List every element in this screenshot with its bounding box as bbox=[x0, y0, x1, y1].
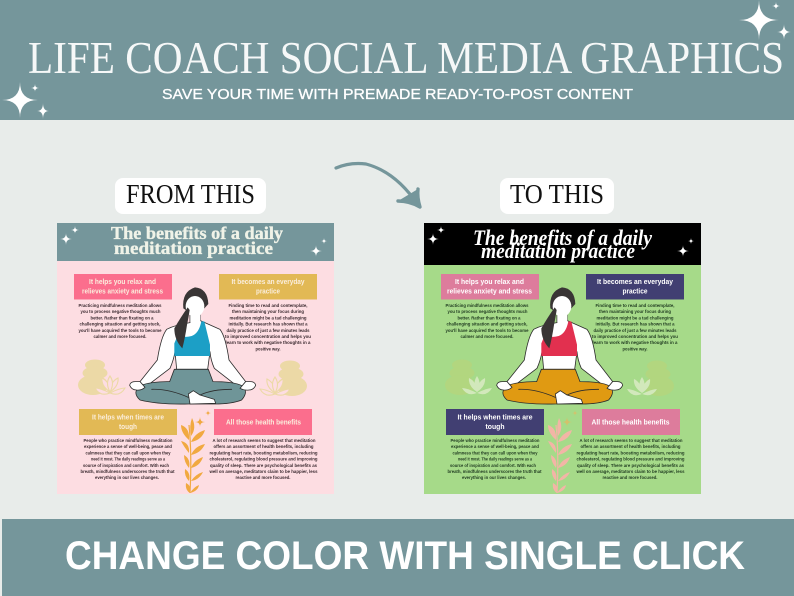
text: everyday body: learn to work with negative thoughts in a bbox=[226, 340, 311, 346]
text: health benefits body: offers an assortment of health benefits, including bbox=[580, 444, 681, 450]
label: tough times: tough bbox=[486, 424, 504, 431]
text: health benefits body: cholesterol, regulating blood pressure and improving bbox=[210, 457, 318, 463]
text: health benefits body: regulating heart rate, boosting metabolism, reducing bbox=[576, 450, 685, 456]
meditating figure bbox=[497, 287, 623, 404]
label: everyday: practice bbox=[622, 288, 648, 296]
label: health benefits: All those health benefits bbox=[226, 420, 301, 426]
text: health benefits body: well on average, meditators claim to be happier, less bbox=[576, 469, 685, 475]
text: everyday body: to improved concentration and helps you bbox=[225, 334, 311, 340]
label: health benefits bbox=[582, 409, 680, 435]
footer band: CHANGE COLOR WITH SINGLE CLICK bbox=[65, 534, 745, 578]
text: relax body: calmer and more focused. bbox=[460, 334, 514, 340]
label: relax bbox=[74, 274, 172, 300]
text: everyday body: initially. But research has shown that a bbox=[596, 322, 675, 328]
text: everyday body: to improved concentration and helps you bbox=[592, 334, 678, 340]
icon: orange branch bbox=[181, 410, 211, 493]
text: tough times body: People who practice mindfulness meditation bbox=[450, 438, 540, 444]
label: tough times: It helps when times are bbox=[458, 414, 533, 422]
text: relax body: Practicing mindfulness meditation allows bbox=[446, 303, 529, 309]
text: tough times body: everything in our lives changes. bbox=[95, 475, 159, 481]
label: tough times bbox=[446, 409, 544, 435]
label: everyday bbox=[586, 274, 684, 300]
panel heading bbox=[57, 223, 334, 261]
text: health benefits body: regulating heart rate, boosting metabolism, reducing bbox=[210, 450, 318, 456]
text: tough times body: breath, mindfulness underscores the truth that bbox=[80, 469, 175, 475]
panel: from this (pink) bbox=[57, 223, 334, 494]
text: health benefits body: well on average, meditators claim to be happier, less bbox=[209, 469, 318, 475]
subtitle: SAVE YOUR TIME WITH PREMADE READY-TO-POST CONTENT bbox=[162, 87, 633, 103]
text: everyday body bbox=[225, 303, 311, 352]
text: relax body: you to process negative thoughts much bbox=[448, 309, 528, 315]
label: everyday: It becomes an everyday bbox=[232, 279, 305, 286]
text: tough times body: need it most. The daily readings serve as a bbox=[458, 457, 532, 463]
label: relax: relieves anxiety and stress bbox=[82, 288, 163, 296]
text: everyday body: meditation might be a tad challenging bbox=[230, 315, 307, 321]
panel heading: The benefits of a daily bbox=[111, 223, 283, 243]
label: tough times bbox=[79, 409, 177, 435]
icon: pink branch bbox=[548, 410, 578, 493]
meditating figure bbox=[130, 287, 256, 404]
text: health benefits body bbox=[576, 438, 685, 481]
text: tough times body: breath, mindfulness underscores the truth that bbox=[448, 469, 542, 475]
label: everyday: It becomes an everyday bbox=[597, 279, 673, 286]
text: health benefits body: A lot of research seems to suggest that meditation bbox=[212, 438, 316, 444]
label: health benefits: All those health benefits bbox=[592, 420, 670, 426]
text: tough times body bbox=[448, 438, 542, 481]
text: health benefits body bbox=[209, 438, 318, 481]
text: health benefits body: quality of sleep. There are psychological benefits as bbox=[210, 463, 317, 469]
text: everyday body: positive way. bbox=[256, 346, 280, 352]
panel heading bbox=[424, 223, 701, 265]
text: everyday body: Finding time to read and contemplate, bbox=[596, 303, 675, 309]
label: relax: It helps you relax and bbox=[455, 279, 524, 286]
text: relax body: Practicing mindfulness meditation allows bbox=[78, 303, 162, 309]
text: everyday body: initially. But research has shown that a bbox=[228, 322, 308, 328]
icon: stones and lotus left bbox=[78, 360, 125, 395]
icon: stones and lotus left bbox=[445, 360, 492, 395]
icon: sparkles top right bbox=[739, 0, 791, 40]
text: tough times body: experience a sense of well-being, peace and bbox=[451, 444, 539, 450]
text: everyday body: then maintaining your focus during bbox=[599, 309, 671, 315]
icon: stones and lotus right bbox=[627, 360, 674, 396]
arrow bbox=[336, 164, 420, 207]
text: relax body bbox=[446, 303, 529, 340]
text: tough times body: calmness that they can call upon when they bbox=[86, 450, 171, 456]
label: relax: relieves anxiety and stress bbox=[447, 288, 532, 296]
text: tough times body: calmness that they can call upon when they bbox=[452, 450, 538, 456]
text: tough times body: everything in our lives changes. bbox=[462, 475, 526, 481]
text: everyday body: positive way. bbox=[622, 346, 648, 352]
text: tough times body bbox=[80, 438, 175, 481]
text: everyday body: meditation might be a tad challenging bbox=[596, 315, 674, 321]
icon: stones and lotus right bbox=[260, 360, 307, 396]
text: relax body bbox=[78, 303, 162, 340]
label: everyday: practice bbox=[256, 288, 280, 296]
label: tough times: tough bbox=[119, 424, 137, 431]
text: everyday body bbox=[592, 303, 678, 352]
text: relax body: better. Rather than fixating on a bbox=[90, 315, 154, 321]
text: relax body: you'll have acquired the tools to become bbox=[78, 328, 162, 334]
text: everyday body: learn to work with negative thoughts in a bbox=[592, 340, 678, 346]
text: relax body: challenging situation and getting stuck, bbox=[80, 322, 161, 328]
text: tough times body: source of inspiration and comfort. With each bbox=[83, 463, 169, 469]
text: tough times body: need it most. The daily readings serve as a bbox=[91, 457, 165, 463]
text: relax body: calmer and more focused. bbox=[94, 334, 146, 340]
panel heading: The benefits of a daily bbox=[473, 225, 652, 250]
footer band bbox=[2, 519, 794, 596]
text: everyday body: daily practice of just a few minutes leads bbox=[226, 328, 310, 334]
text: health benefits body: A lot of research seems to suggest that meditation bbox=[580, 438, 683, 444]
text: tough times body: People who practice mindfulness meditation bbox=[84, 438, 173, 444]
to this label: TO THIS bbox=[510, 179, 604, 209]
text: health benefits body: reactive and more focused. bbox=[602, 475, 658, 481]
header band bbox=[0, 0, 794, 120]
text: tough times body: experience a sense of well-being, peace and bbox=[84, 444, 172, 450]
text: relax body: you to process negative thoughts much bbox=[80, 309, 161, 315]
text: everyday body: daily practice of just a few minutes leads bbox=[594, 328, 677, 334]
label: everyday bbox=[219, 274, 317, 300]
text: health benefits body: quality of sleep. There are psychological benefits as bbox=[577, 463, 684, 469]
text: relax body: challenging situation and getting stuck, bbox=[446, 322, 528, 328]
icon: sparkles bottom left bbox=[2, 82, 49, 119]
text: tough times body: source of inspiration and comfort. With each bbox=[450, 463, 536, 469]
text: relax body: better. Rather than fixating on a bbox=[458, 315, 521, 321]
label: relax: It helps you relax and bbox=[89, 279, 156, 286]
text: health benefits body: cholesterol, regulating blood pressure and improving bbox=[576, 457, 685, 463]
from this label: FROM THIS bbox=[126, 179, 255, 209]
label: tough times: It helps when times are bbox=[92, 414, 164, 422]
panel heading: meditation practice bbox=[481, 238, 635, 263]
text: health benefits body: offers an assortment of health benefits, including bbox=[214, 444, 314, 450]
label: health benefits bbox=[214, 409, 312, 435]
panel heading: meditation practice bbox=[114, 238, 273, 258]
text: everyday body: Finding time to read and contemplate, bbox=[228, 303, 308, 309]
text: relax body: you'll have acquired the tools to become bbox=[446, 328, 529, 334]
text: health benefits body: reactive and more focused. bbox=[236, 475, 290, 481]
panel: to this (green) bbox=[424, 223, 701, 494]
label: relax bbox=[441, 274, 539, 300]
text: everyday body: then maintaining your focus during bbox=[232, 309, 304, 315]
